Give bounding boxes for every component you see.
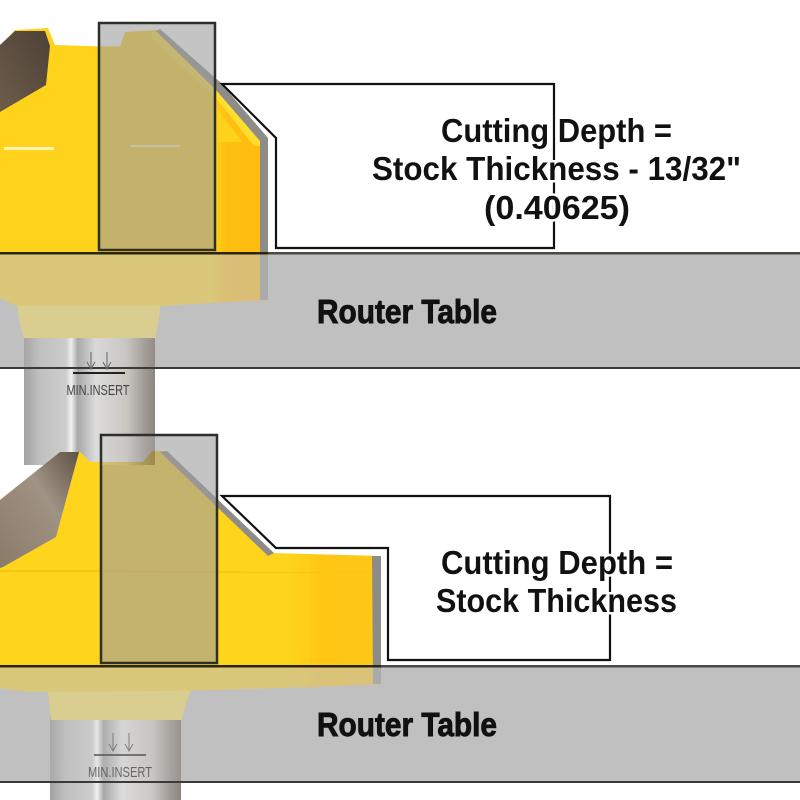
icon: upper min insert mark: MIN.INSERT bbox=[66, 382, 130, 399]
upper cutting depth text bbox=[372, 112, 741, 226]
lower cutting depth text bbox=[436, 544, 677, 619]
router bit: second bit bbox=[0, 451, 381, 800]
upper cutting depth text: Cutting Depth = bbox=[441, 112, 672, 149]
upper cutting depth text: (0.40625) bbox=[484, 189, 630, 226]
panel: upper router table bbox=[0, 252, 800, 369]
icon: lower min insert mark bbox=[88, 733, 152, 781]
panel: lower stock piece bbox=[100, 434, 218, 664]
upper router table label: Router Table bbox=[317, 293, 497, 330]
upper callout outline bbox=[222, 84, 554, 248]
upper cutting depth text: Stock Thickness - 13/32" bbox=[372, 150, 741, 187]
lower router table label: Router Table bbox=[317, 706, 497, 743]
router bit: lower shank above second bit bbox=[0, 28, 268, 465]
lower cutting depth text: Stock Thickness bbox=[436, 582, 677, 619]
lower cutting depth text: Cutting Depth = bbox=[441, 544, 673, 581]
panel: upper stock piece bbox=[98, 22, 216, 252]
panel: lower router table bbox=[0, 665, 800, 783]
icon: upper min insert mark bbox=[66, 352, 130, 399]
lower callout outline bbox=[222, 496, 610, 660]
icon: lower min insert mark: MIN.INSERT bbox=[88, 764, 152, 781]
